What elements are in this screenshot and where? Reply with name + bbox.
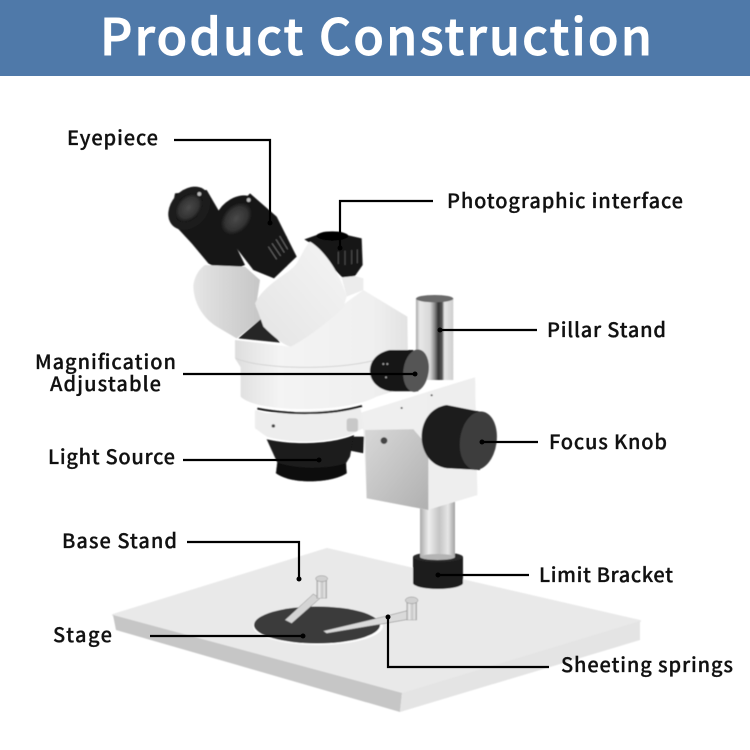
line: base stand bbox=[187, 542, 299, 579]
objective ring and light source bbox=[255, 406, 364, 481]
label: magnification adjustable: Adjustable bbox=[50, 368, 161, 397]
magnification knob bbox=[370, 348, 431, 394]
label: focus knob: Focus Knob bbox=[549, 426, 667, 455]
label: base stand: Base Stand bbox=[62, 525, 177, 554]
title: Product Construction bbox=[100, 0, 652, 70]
stage clips bbox=[285, 576, 418, 633]
limit bracket collar bbox=[413, 540, 463, 589]
lower pillar bbox=[420, 500, 455, 560]
line: eyepiece bbox=[174, 140, 270, 223]
callout dots bbox=[268, 220, 484, 638]
label: light source: Light Source bbox=[48, 441, 175, 470]
prism wedge bbox=[238, 318, 280, 343]
line: sheeting springs bbox=[388, 617, 549, 667]
line: stage bbox=[150, 635, 303, 637]
lower body cylinder bbox=[235, 290, 408, 409]
label: stage: Stage bbox=[53, 619, 112, 648]
right tube bbox=[255, 242, 347, 347]
label: magnification adjustable: Magnification bbox=[35, 346, 176, 375]
label: magnification adjustable bbox=[35, 346, 176, 397]
microscope illustration bbox=[113, 178, 640, 712]
microscope body in detail bbox=[160, 178, 501, 510]
label: photographic interface: Photographic interface bbox=[447, 185, 683, 214]
line: focus knob bbox=[482, 441, 538, 443]
label: eyepiece: Eyepiece bbox=[67, 122, 158, 151]
focus knob bbox=[422, 405, 501, 472]
left tube bbox=[193, 265, 262, 338]
line: light source bbox=[183, 459, 319, 461]
label: sheeting springs: Sheeting springs bbox=[561, 649, 733, 678]
right eyepiece bbox=[204, 186, 297, 278]
label: limit bracket: Limit Bracket bbox=[539, 559, 673, 588]
left eyepiece bbox=[160, 178, 245, 273]
line: pillar stand bbox=[440, 329, 537, 331]
line: photographic interface bbox=[340, 201, 433, 248]
photographic interface bbox=[304, 231, 363, 297]
line: magnification bbox=[183, 373, 415, 375]
pillar stand bbox=[416, 295, 453, 380]
line: limit bracket bbox=[438, 574, 529, 576]
callout lines bbox=[150, 140, 549, 667]
base plate bbox=[113, 549, 640, 712]
label: pillar stand: Pillar Stand bbox=[547, 314, 666, 343]
bracket block bbox=[353, 377, 477, 510]
header banner bbox=[0, 0, 750, 76]
